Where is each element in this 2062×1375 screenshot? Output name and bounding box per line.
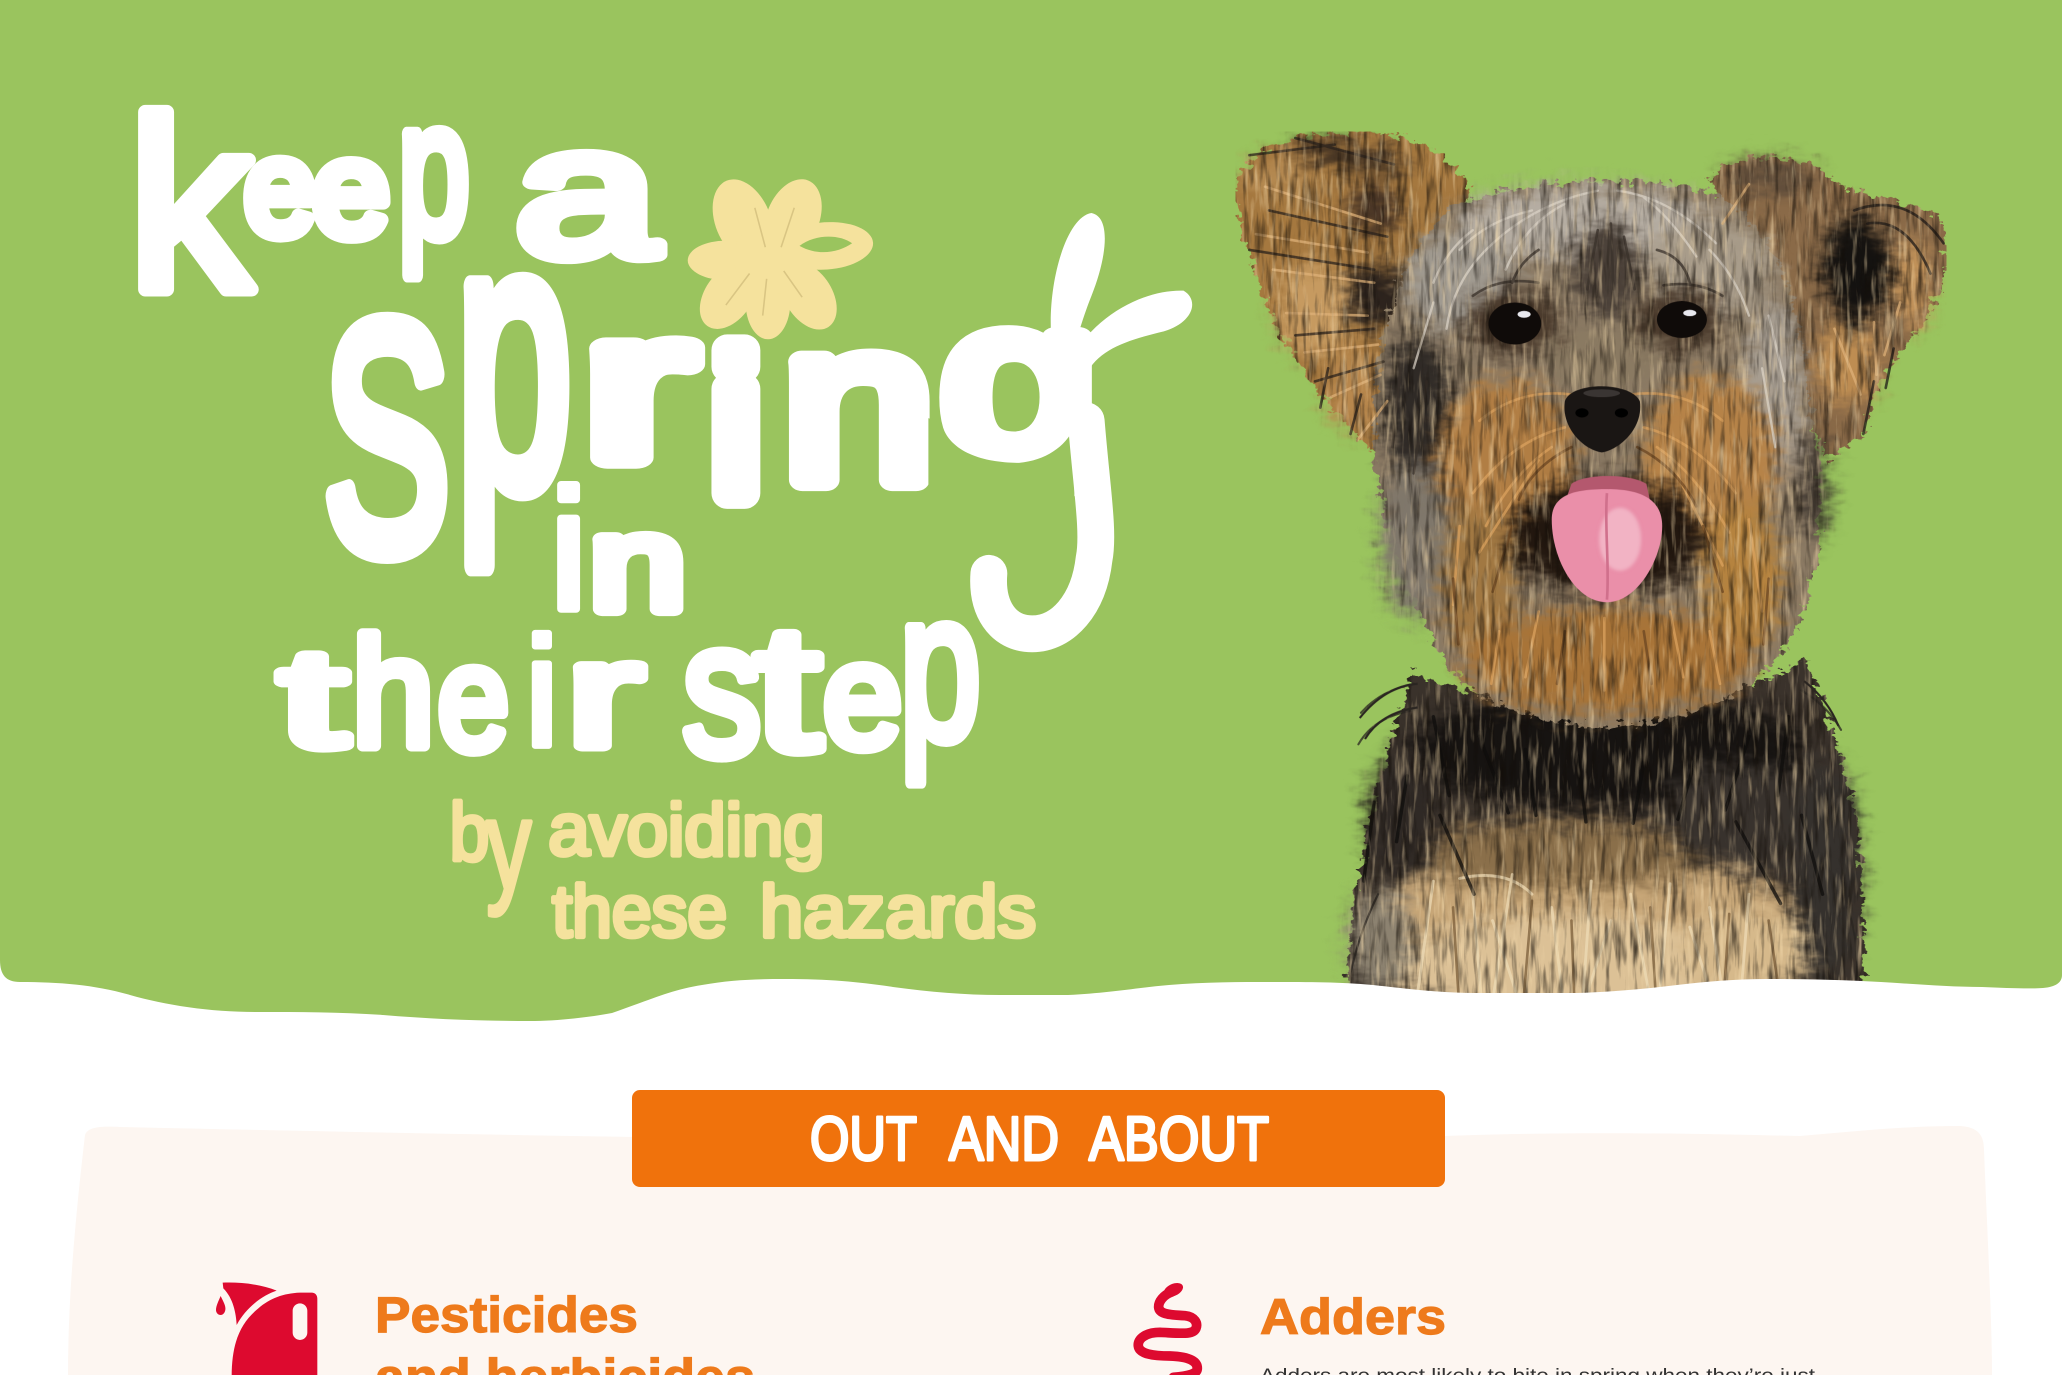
banner label: OUT — [810, 1105, 916, 1174]
bunny ears on g — [1051, 213, 1192, 375]
subtitle: by avoiding these hazards — [450, 775, 1036, 952]
coat fur strands — [1249, 138, 1944, 993]
panel: out and about — [68, 1126, 1992, 1375]
title word: Spring: n — [784, 279, 934, 528]
title line: their step: r — [567, 612, 643, 778]
title line: their step: t — [280, 622, 346, 776]
title line: their step: p — [899, 549, 981, 784]
subtitle: by avoiding these hazards: avoiding — [548, 788, 825, 871]
subtitle: by avoiding these hazards: hazards — [760, 869, 1036, 952]
title word: Spring: r — [585, 271, 693, 502]
photo: Yorkshire terrier dog — [1236, 132, 1946, 1023]
heading: pesticides and herbicides: Pesticides — [375, 1287, 638, 1343]
dog tongue — [1552, 476, 1662, 602]
title word: Spring: g — [942, 255, 1097, 504]
heading: pesticides and herbicides — [375, 1287, 755, 1375]
dog head — [1374, 181, 1820, 726]
title line: their step: s — [682, 583, 761, 796]
subtitle: by avoiding these hazards: these — [552, 869, 727, 952]
title word: Spring: i — [714, 314, 758, 535]
title word: in: n — [590, 490, 685, 637]
title line: keep a: p — [398, 61, 469, 276]
title line: their step: t — [755, 589, 821, 788]
title line: their step: h — [352, 607, 434, 779]
icon: snake — [1138, 1280, 1197, 1375]
icon: spray bottle — [216, 1283, 317, 1375]
dog right ear — [1710, 157, 1946, 460]
stray hairs — [1360, 681, 1838, 739]
title word: Spring: p — [456, 145, 572, 569]
title line: keep a — [129, 61, 658, 341]
banner label: ABOUT — [1089, 1105, 1269, 1174]
dog coat — [1236, 132, 1946, 1023]
dog left ear — [1236, 132, 1470, 454]
dog nose — [1564, 386, 1640, 452]
dog body — [1344, 658, 1867, 1013]
banner label: AND — [949, 1105, 1059, 1174]
title line: their step: i — [525, 606, 559, 779]
title line: keep a: e — [245, 114, 316, 263]
hero artwork — [129, 61, 1946, 1023]
white wavy section below hero — [0, 960, 2062, 1375]
section banner: out and about — [632, 1090, 1445, 1187]
heading: adders: Adders — [1260, 1289, 1446, 1345]
hero green background — [0, 0, 2062, 1040]
subtitle: by avoiding these hazards: b — [450, 787, 489, 878]
dog eyes — [1489, 301, 1707, 345]
flower decoration — [688, 170, 875, 340]
title line: their step: e — [823, 613, 902, 779]
title word: in: i — [550, 455, 588, 646]
title word: in — [550, 455, 685, 646]
title line: keep a: a — [515, 89, 658, 295]
title line: their step: e — [438, 616, 509, 782]
subtitle: by avoiding these hazards: y — [487, 775, 531, 917]
title line: keep a: k — [129, 68, 252, 341]
title line: their step — [280, 549, 981, 796]
title word: Spring: S — [323, 256, 450, 619]
flourish: g tail — [989, 421, 1096, 634]
title line: keep a: e — [313, 115, 389, 264]
title word: Spring — [323, 145, 1097, 619]
